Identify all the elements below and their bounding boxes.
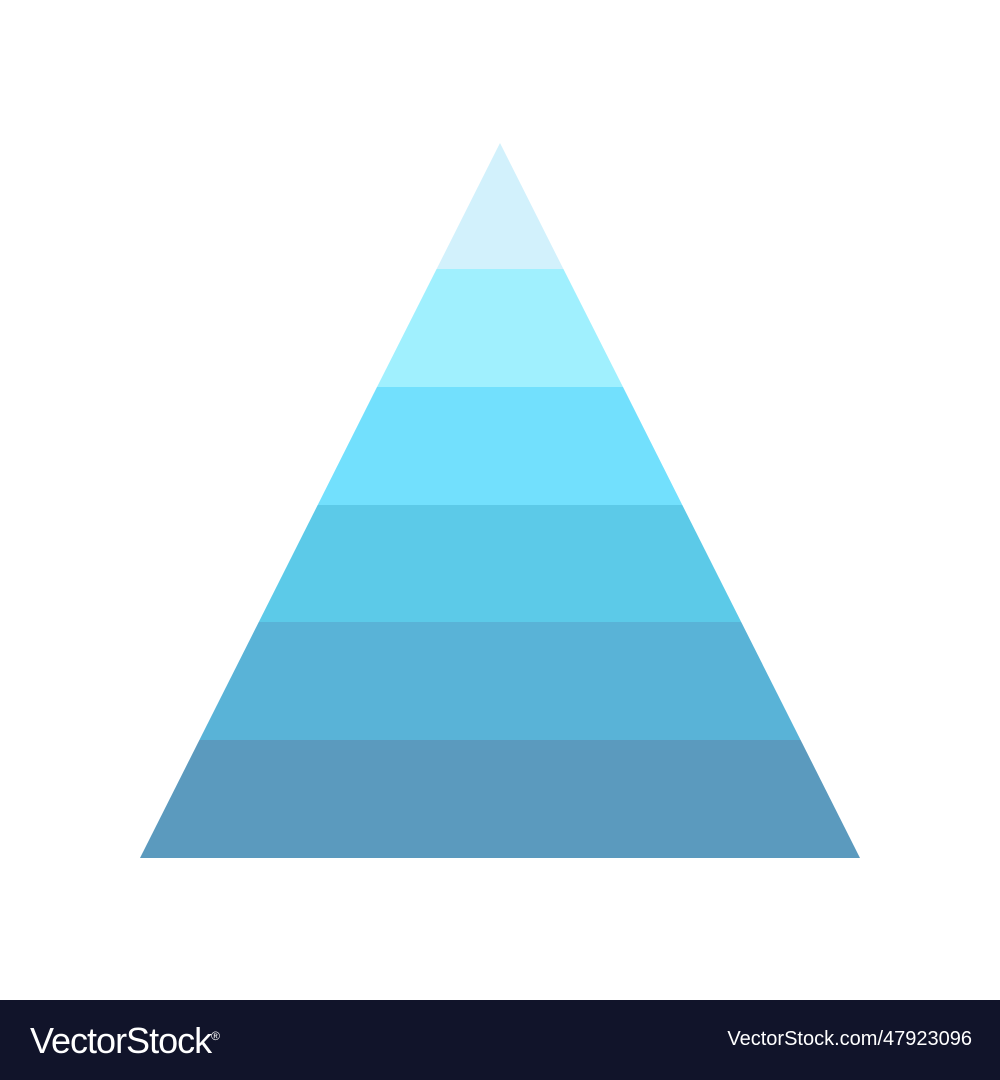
pyramid level 3 xyxy=(318,387,682,505)
pyramid level 4 xyxy=(259,505,741,622)
pyramid level 2 xyxy=(377,269,623,387)
pyramid level 5 xyxy=(199,622,801,740)
footer bar xyxy=(0,1000,1000,1080)
brand logo text: VectorStock® xyxy=(30,1020,219,1061)
pyramid level 6 (base) xyxy=(140,740,860,858)
pyramid level 1 (top) xyxy=(437,143,563,269)
image url text: VectorStock.com/47923096 xyxy=(727,1028,972,1050)
